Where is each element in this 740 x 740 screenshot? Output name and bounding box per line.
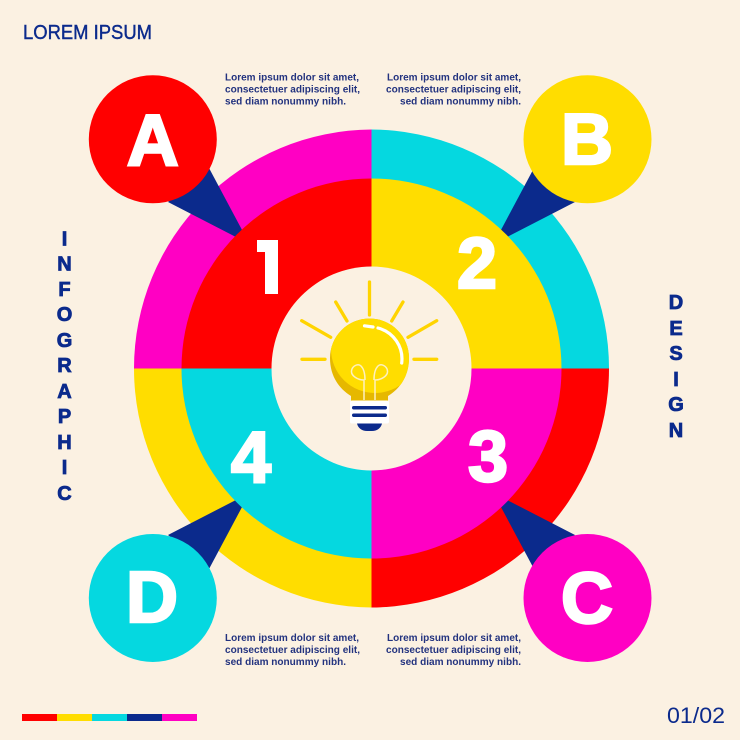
number 1: 1 [248, 229, 288, 309]
pointer B [494, 168, 575, 244]
color legend bar [22, 714, 197, 721]
text block: bottom right: sed diam nonummy nibh. [400, 656, 521, 668]
text block: top left: sed diam nonummy nibh. [225, 96, 346, 108]
vertical heading: INFOGRAPHIC: O [57, 304, 72, 326]
title: LOREM IPSUM [23, 22, 152, 44]
center disc [272, 266, 472, 470]
number 1 [257, 240, 278, 294]
text block: bottom right: Lorem ipsum dolor sit amet, [387, 632, 521, 644]
text block: bottom right: consectetuer adipiscing elit, [386, 644, 521, 656]
text block: top right [386, 72, 521, 108]
segment 3 [372, 368, 562, 558]
filament [351, 365, 388, 400]
vertical heading: INFOGRAPHIC: N [57, 254, 72, 276]
vertical heading: INFOGRAPHIC: G [57, 330, 72, 352]
vertical heading: INFOGRAPHIC: H [57, 432, 72, 454]
text block: bottom left: sed diam nonummy nibh. [225, 656, 346, 668]
vertical heading: INFOGRAPHIC: I [62, 228, 67, 250]
bulb base [350, 400, 389, 424]
bulb shade [330, 319, 409, 401]
vertical heading: INFOGRAPHIC: R [57, 355, 72, 377]
bulb glass [331, 318, 409, 393]
vertical heading: INFOGRAPHIC: I [62, 457, 67, 479]
pointer C [494, 493, 575, 569]
text block: bottom left: Lorem ipsum dolor sit amet, [225, 632, 359, 644]
number 2: 2 [457, 224, 497, 304]
page number: 01/02 [667, 703, 725, 728]
text block: bottom left [225, 632, 360, 668]
pointer A [168, 168, 250, 244]
segment 4 [182, 368, 372, 558]
vertical heading: INFOGRAPHIC: P [58, 406, 71, 428]
vertical heading: INFOGRAPHIC [57, 228, 72, 505]
text block: top right: Lorem ipsum dolor sit amet, [387, 72, 521, 84]
text block: top right: consectetuer adipiscing elit, [386, 84, 521, 96]
badge A: A [127, 101, 179, 181]
text block: top right: sed diam nonummy nibh. [400, 96, 521, 108]
text block: top left [225, 72, 360, 108]
highlight [364, 326, 402, 363]
vertical heading: DESIGN: E [669, 318, 683, 340]
number 4: 4 [231, 418, 271, 498]
vertical heading: DESIGN: D [669, 292, 683, 314]
vertical heading: INFOGRAPHIC: F [58, 279, 71, 301]
number 3: 3 [468, 417, 508, 497]
badge C [524, 534, 652, 662]
base stripes [352, 406, 387, 431]
outer ring segments [134, 130, 609, 608]
text block: top left: consectetuer adipiscing elit, [225, 84, 360, 96]
text block: top left: Lorem ipsum dolor sit amet, [225, 72, 359, 84]
badge B [524, 75, 652, 203]
badge D: D [126, 558, 178, 638]
vertical heading: DESIGN: G [668, 394, 684, 416]
vertical heading: INFOGRAPHIC: C [57, 483, 72, 505]
vertical heading: DESIGN: I [673, 369, 679, 391]
vertical heading: DESIGN [668, 292, 684, 442]
icon: light bulb [302, 282, 437, 431]
rays [302, 282, 437, 359]
text block: bottom left: consectetuer adipiscing elit, [225, 644, 360, 656]
badge B: B [561, 100, 613, 180]
segment 2 [372, 178, 562, 368]
badge D [89, 534, 217, 662]
text block: bottom right [386, 632, 521, 668]
badge A [89, 75, 217, 203]
segment 1 [182, 178, 372, 368]
pointer D [168, 493, 250, 569]
vertical heading: INFOGRAPHIC: A [57, 381, 72, 403]
vertical heading: DESIGN: S [669, 343, 683, 365]
vertical heading: DESIGN: N [669, 420, 683, 442]
badge C: C [561, 559, 613, 639]
